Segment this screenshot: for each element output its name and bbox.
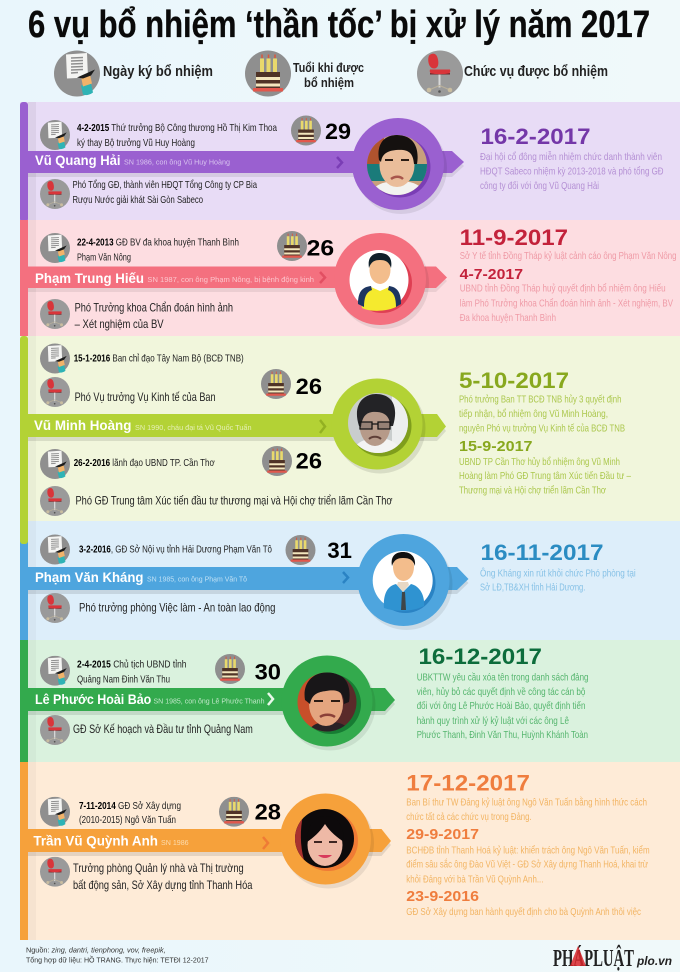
chevron — [343, 572, 348, 583]
outcome: Phó trưởng Ban TT BCĐ TNB hủy 3 quyết định — [459, 394, 622, 406]
panel: Phạm Trung Hiếu — [20, 220, 680, 338]
name: Vũ Minh Hoàng — [34, 418, 131, 433]
ribbon shadow — [28, 155, 464, 177]
position icon 1 — [40, 377, 70, 407]
position icon — [40, 299, 70, 329]
position icon — [40, 593, 70, 623]
outcome: 4-7-2017 — [460, 266, 523, 283]
age: 29 — [325, 119, 351, 144]
position text: bất động sản, Sở Xây dựng tỉnh Thanh Hóa — [73, 878, 253, 892]
chevron — [337, 157, 342, 168]
name: Trần Vũ Quỳnh Anh — [33, 834, 158, 849]
portrait circle — [334, 233, 429, 329]
outcome: Hoàng làm Phó GĐ Trung tâm Xúc tiến Đầu tư – — [459, 470, 631, 482]
position text: – Xét nghiệm của BV — [75, 317, 164, 331]
position text: Phó Tổng GĐ, thành viên HĐQT Tổng Công ty CP Bia — [72, 179, 257, 191]
name — [35, 570, 247, 585]
appointment text — [77, 122, 277, 149]
outcome: 5-10-2017 — [459, 368, 569, 393]
name: Phạm Văn Kháng — [35, 570, 144, 585]
position text — [72, 179, 257, 206]
appointment text: 4-2-2015 Thứ trưởng Bộ Công thương Hồ Thị Kim Thoa — [77, 122, 277, 134]
outcome: đối với ông Lê Phước Hoài Bảo, quyết định tiến — [417, 700, 586, 712]
age 2 — [262, 446, 322, 476]
age 1 — [261, 369, 322, 399]
footer source — [26, 946, 209, 965]
outcome: 17-12-2017 — [406, 771, 530, 796]
outcome: 29-9-2017 — [406, 826, 479, 843]
legend item: age when appointed: bổ nhiệm — [304, 75, 354, 90]
age: 26 — [307, 236, 334, 261]
outcome: Đa khoa huyện Thanh Bình — [460, 312, 556, 324]
outcome: hành quy trình xử lý kỷ luật với các ông Lê — [417, 715, 569, 727]
outcome: viên, hủy bỏ các quyết định về công tác cán bộ — [417, 686, 586, 698]
position text 2: Phó GĐ Trung tâm Xúc tiến đầu tư thương mại và Hội chợ triển lãm Cần Thơ — [76, 493, 393, 507]
ribbon — [28, 414, 446, 437]
outcome: UBKTTW yêu cầu xóa tên trong danh sách đảng — [417, 672, 589, 684]
name — [35, 271, 314, 286]
position text: Rượu Nước giải khát Sài Gòn Sabeco — [72, 194, 203, 206]
age — [291, 116, 351, 146]
chevron — [268, 693, 273, 705]
name: SN 1987, con ông Phạm Nông, bị bệnh động kinh — [147, 275, 314, 284]
signing date icon — [40, 534, 70, 564]
outcome: 15-9-2017 — [459, 438, 532, 455]
position text — [75, 301, 233, 331]
outcome: 16-11-2017 — [480, 540, 604, 565]
position text — [73, 861, 253, 892]
portrait circle — [332, 378, 426, 474]
legend item: signing date — [54, 50, 213, 96]
name: SN 1986 — [161, 838, 189, 847]
outcome — [459, 368, 631, 497]
outcome — [460, 225, 677, 324]
appointment text: Phạm Văn Nông — [77, 252, 131, 264]
name: SN 1990, cháu đại tá Vũ Quốc Tuấn — [135, 423, 252, 432]
legend item: position appointed — [417, 50, 608, 96]
position text: Trưởng phòng Quản lý nhà và Thị trường — [73, 861, 244, 875]
signing date icon — [40, 120, 70, 150]
appointment text: 2-4-2015 Chủ tịch UBND tỉnh — [77, 659, 187, 671]
ribbon shadow — [28, 571, 468, 594]
panel: Vũ Minh Hoàng — [20, 336, 680, 521]
position text 1: Phó Vụ trưởng Vụ Kinh tế của Ban — [75, 390, 216, 404]
outcome: tiếp nhận, bổ nhiệm ông Vũ Minh Hoàng, — [459, 408, 608, 420]
ribbon — [28, 829, 391, 852]
outcome — [480, 540, 636, 594]
outcome: 16-2-2017 — [480, 124, 590, 149]
outcome — [417, 644, 589, 741]
footer source: Tổng hợp dữ liệu: HỒ TRANG. Thực hiện: TETĐI 12-2017 — [26, 955, 209, 965]
chevron — [263, 837, 268, 849]
position icon 2 — [40, 486, 70, 516]
name — [35, 692, 264, 707]
appointment text 2: 26-2-2016 lãnh đạo UBND TP. Cần Thơ — [74, 457, 215, 469]
position text: GĐ Sở Kế hoạch và Đầu tư tỉnh Quảng Nam — [73, 722, 253, 736]
ribbon — [28, 688, 395, 711]
name: SN 1986, con ông Vũ Huy Hoàng — [124, 158, 230, 166]
signing date icon — [40, 656, 70, 686]
legend item: signing date: Ngày ký bổ nhiệm — [103, 63, 213, 80]
outcome: 11-9-2017 — [460, 225, 568, 250]
age: 28 — [255, 799, 281, 824]
logo: Pháp Luật plo.vn: plo.vn — [636, 954, 672, 968]
name: SN 1985, con ông Lê Phước Thanh — [154, 696, 264, 706]
legend — [54, 50, 608, 96]
age 1: 26 — [296, 374, 322, 399]
name: Phạm Trung Hiếu — [35, 271, 144, 286]
legend item: age when appointed — [245, 50, 364, 96]
signing date icon — [40, 797, 70, 827]
portrait circle — [352, 118, 447, 214]
name: Lê Phước Hoài Bảo — [35, 692, 151, 707]
position icon — [40, 857, 70, 887]
outcome: chức tất cả các chức vụ trong Đảng. — [406, 811, 532, 823]
outcome: Phước Thanh, Đinh Văn Thu, Huỳnh Khánh Toàn — [417, 729, 588, 741]
outcome: UBND TP Cần Thơ hủy bổ nhiệm ông Vũ Minh — [459, 456, 620, 468]
panel: Trần Vũ Quỳnh Anh — [20, 762, 680, 940]
panel: Lê Phước Hoài Bảo — [20, 640, 680, 762]
position text: Phó Trưởng khoa Chẩn đoán hình ảnh — [75, 301, 233, 315]
name: Vũ Quang Hải — [35, 153, 120, 168]
footer source: Nguồn: zing, dantri, tienphong, vov, freepik, — [26, 946, 166, 955]
outcome: nguyên Phó vụ trưởng Vụ Kinh tế của BCĐ TNB — [459, 423, 625, 435]
panel: Vũ Quang Hải — [20, 102, 680, 222]
chevron — [320, 272, 325, 283]
appointment text: 3-2-2016, GĐ Sở Nội vụ tỉnh Hải Dương Phạm Văn Tô — [79, 544, 272, 556]
outcome — [480, 124, 664, 192]
appointment text: (2010-2015) Ngô Văn Tuấn — [79, 814, 176, 826]
age 2: 26 — [296, 448, 322, 473]
age — [219, 797, 281, 827]
signing date icon 1 — [40, 344, 70, 374]
age: 30 — [255, 659, 281, 684]
portrait circle — [280, 794, 374, 888]
ribbon shadow — [28, 270, 447, 292]
age — [286, 535, 352, 565]
legend item: age when appointed: Tuổi khi được — [293, 60, 364, 75]
ribbon shadow — [28, 418, 446, 441]
ribbon — [28, 567, 468, 590]
age — [215, 654, 281, 684]
ribbon shadow — [28, 692, 395, 715]
outcome: Ông Kháng xin rút khỏi chức Phó phòng tại — [480, 567, 636, 580]
age: 31 — [327, 538, 352, 563]
appointment text: Quảng Nam Đinh Văn Thu — [77, 673, 170, 685]
legend item: position appointed: Chức vụ được bổ nhiệm — [464, 63, 608, 80]
green bar end overlapping blue panel — [20, 336, 28, 544]
appointment text 1: 15-1-2016 Ban chỉ đạo Tây Nam Bộ (BCĐ TNB) — [74, 353, 244, 365]
appointment text — [77, 237, 239, 264]
signing date icon 2 — [40, 449, 70, 479]
portrait circle — [282, 656, 376, 750]
position text: Phó trưởng phòng Việc làm - An toàn lao động — [79, 601, 275, 615]
name — [34, 418, 252, 433]
appointment text — [79, 800, 181, 826]
appointment text: ký thay Bộ trưởng Vũ Huy Hoàng — [77, 137, 195, 149]
outcome: 23-9-2016 — [406, 888, 479, 905]
name — [35, 153, 230, 168]
ribbon — [28, 151, 464, 173]
portrait circle — [358, 534, 452, 630]
chevron — [320, 420, 325, 433]
outcome: 16-12-2017 — [418, 644, 542, 669]
position icon — [40, 179, 70, 209]
outcome: công ty đối với ông Vũ Quang Hải — [480, 180, 599, 192]
signing date icon — [40, 233, 70, 263]
outcome: Sở LĐ,TB&XH tỉnh Hải Dương. — [480, 582, 585, 594]
ribbon shadow — [28, 833, 391, 856]
appointment text: 22-4-2013 GĐ BV đa khoa huyện Thanh Bình — [77, 237, 239, 249]
appointment text: 7-11-2014 GĐ Sở Xây dựng — [79, 800, 181, 812]
outcome: Thương mại và Hội chợ triển lãm Cần Thơ — [459, 485, 606, 497]
outcome — [406, 771, 650, 918]
age — [277, 231, 334, 261]
ribbon — [28, 266, 447, 288]
name: SN 1985, con ông Phạm Văn Tô — [147, 574, 247, 584]
position icon — [40, 715, 70, 745]
appointment text — [77, 659, 187, 685]
panel: Phạm Văn Kháng — [20, 521, 680, 640]
outcome: khỏi Đảng với bà Trần Vũ Quỳnh Anh... — [406, 873, 543, 885]
